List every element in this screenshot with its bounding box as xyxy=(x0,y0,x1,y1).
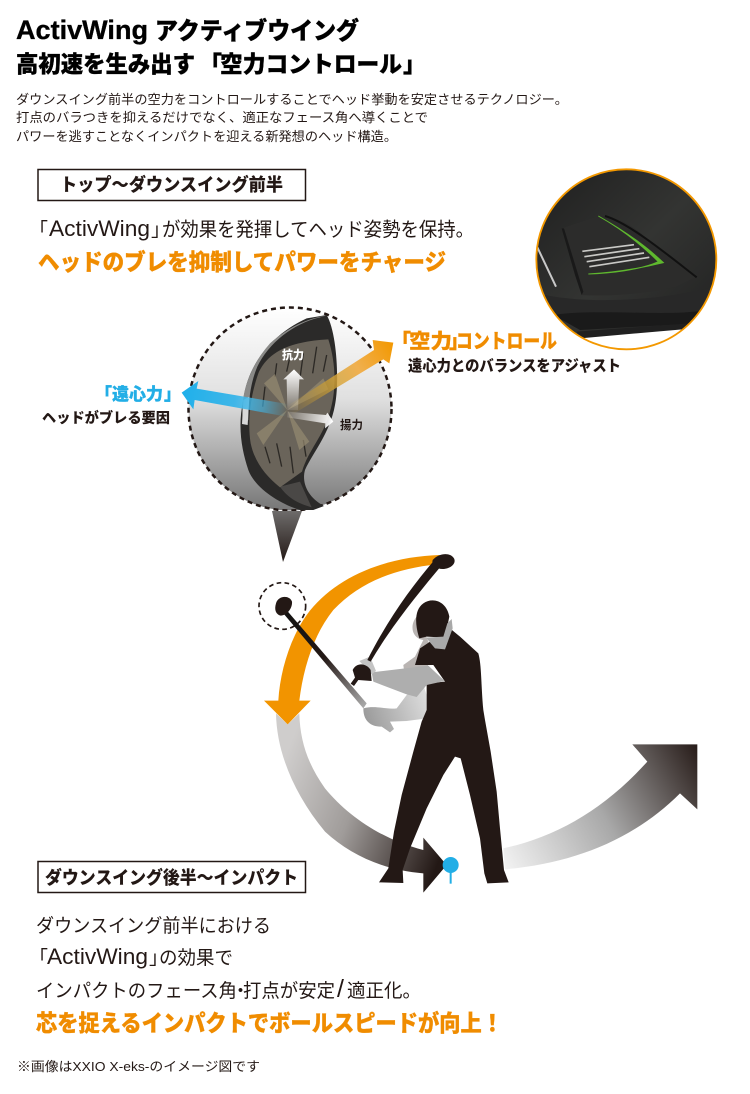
label: centrifugal force: 」 xyxy=(164,385,181,404)
arrow: rising follow-through arc xyxy=(503,744,697,869)
orange emphasis impact section: 芯を捉えるインパクトでボールスピードが向上！ xyxy=(36,1010,503,1036)
title: 空力コントロール xyxy=(220,51,402,77)
label: aero control: 「 xyxy=(391,330,411,353)
label: centrifugal force xyxy=(42,384,181,427)
swing diagram xyxy=(259,554,509,893)
orange emphasis top section: ヘッドのブレを抑制してパワーをチャージ xyxy=(38,249,446,275)
description impact section: 」 xyxy=(149,948,168,969)
description impact section: の効果で xyxy=(159,947,233,969)
label: drag: 抗力 xyxy=(282,347,304,362)
label: aero control: 遠心力とのバランスをアジャスト xyxy=(408,357,621,375)
tee and ball xyxy=(443,857,459,884)
photo: ActivWing close-up xyxy=(530,167,720,353)
wrist xyxy=(359,657,376,674)
label: centrifugal force: ヘッドがブレる要因 xyxy=(42,409,170,427)
title: 「 xyxy=(199,51,222,77)
address club shaft xyxy=(283,611,367,708)
label: aero control: 」 xyxy=(449,331,469,353)
heading: top to downswing first half: トップ〜ダウンスイング前半 xyxy=(60,174,283,195)
footnote: ※画像はXXIO X-eks-のイメージ図です xyxy=(17,1059,260,1074)
description impact section: 打点が安定 xyxy=(243,980,335,1002)
description impact section: インパクトのフェース角 xyxy=(36,980,237,1002)
arrow: centrifugal force xyxy=(182,381,287,417)
intro text block: パワーを逃すことなくインパクトを迎える新発想のヘッド構造。 xyxy=(16,129,397,144)
icon: pointer triangle xyxy=(272,511,302,562)
intro text block xyxy=(16,92,568,144)
label: aero control: コントロール xyxy=(456,331,557,353)
label: centrifugal force: 「 xyxy=(95,385,112,404)
body silhouette xyxy=(379,628,509,883)
dashed magnifier circle xyxy=(188,308,392,510)
arrow: lift xyxy=(287,412,333,428)
description top section xyxy=(29,216,474,241)
rear head shadow xyxy=(403,617,430,678)
face grooves xyxy=(263,347,327,473)
label: aero control xyxy=(391,330,621,375)
description top section: ActivWing xyxy=(49,216,150,241)
arrow: orange backswing arc xyxy=(264,555,440,724)
label: lift: 揚力 xyxy=(340,417,363,432)
face xyxy=(426,619,453,649)
description impact section: ActivWing xyxy=(47,944,148,969)
title xyxy=(16,15,426,77)
description top section: 「 xyxy=(29,219,48,241)
description impact section: / xyxy=(337,975,344,1003)
top club shaft xyxy=(367,559,443,662)
intro text block: 打点のバラつきを抑えるだけでなく、適正なフェース角へ導くことで xyxy=(16,110,428,125)
club head body xyxy=(240,315,337,510)
description top section: が効果を発揮してヘッド姿勢を保持。 xyxy=(162,219,474,241)
arrow: aero control xyxy=(287,340,393,416)
arrow: gray downswing arc xyxy=(276,713,447,893)
title: アクティブウイング xyxy=(155,17,359,45)
title: ActivWing xyxy=(16,15,148,45)
head detail circle xyxy=(182,308,393,562)
club head rim highlights xyxy=(242,316,325,423)
club face xyxy=(249,339,335,487)
description impact section: ダウンスイング前半における xyxy=(36,915,271,937)
top club head xyxy=(432,554,455,569)
description impact section: 適正化。 xyxy=(347,980,421,1002)
heading: downswing second half to impact xyxy=(38,862,306,892)
intro text block: ダウンスイング前半の空力をコントロールすることでヘッド挙動を安定させるテクノロジー。 xyxy=(16,92,568,107)
label: aero control: 空力 xyxy=(409,330,452,353)
heading: top to downswing first half xyxy=(38,170,306,200)
golfer xyxy=(275,554,509,883)
arrow: drag xyxy=(283,369,304,410)
title: 高初速を生み出す xyxy=(16,51,195,77)
X pattern on face xyxy=(257,374,328,450)
dashed circle around address head xyxy=(259,583,306,629)
label: centrifugal force: 遠心力 xyxy=(112,384,163,404)
rear lower arm xyxy=(363,685,427,732)
club head face with force arrows xyxy=(182,315,393,510)
address club head xyxy=(275,597,292,616)
description top section: 」 xyxy=(151,220,170,241)
description impact section xyxy=(29,915,421,1003)
heading: downswing second half to impact: ダウンスイング後半〜インパクト xyxy=(45,867,298,888)
top hand grip xyxy=(351,664,372,686)
head xyxy=(416,600,449,638)
description impact section: ・ xyxy=(231,981,250,1002)
description impact section: 「 xyxy=(29,947,48,969)
title: 」 xyxy=(403,51,426,77)
front arm xyxy=(372,666,445,697)
